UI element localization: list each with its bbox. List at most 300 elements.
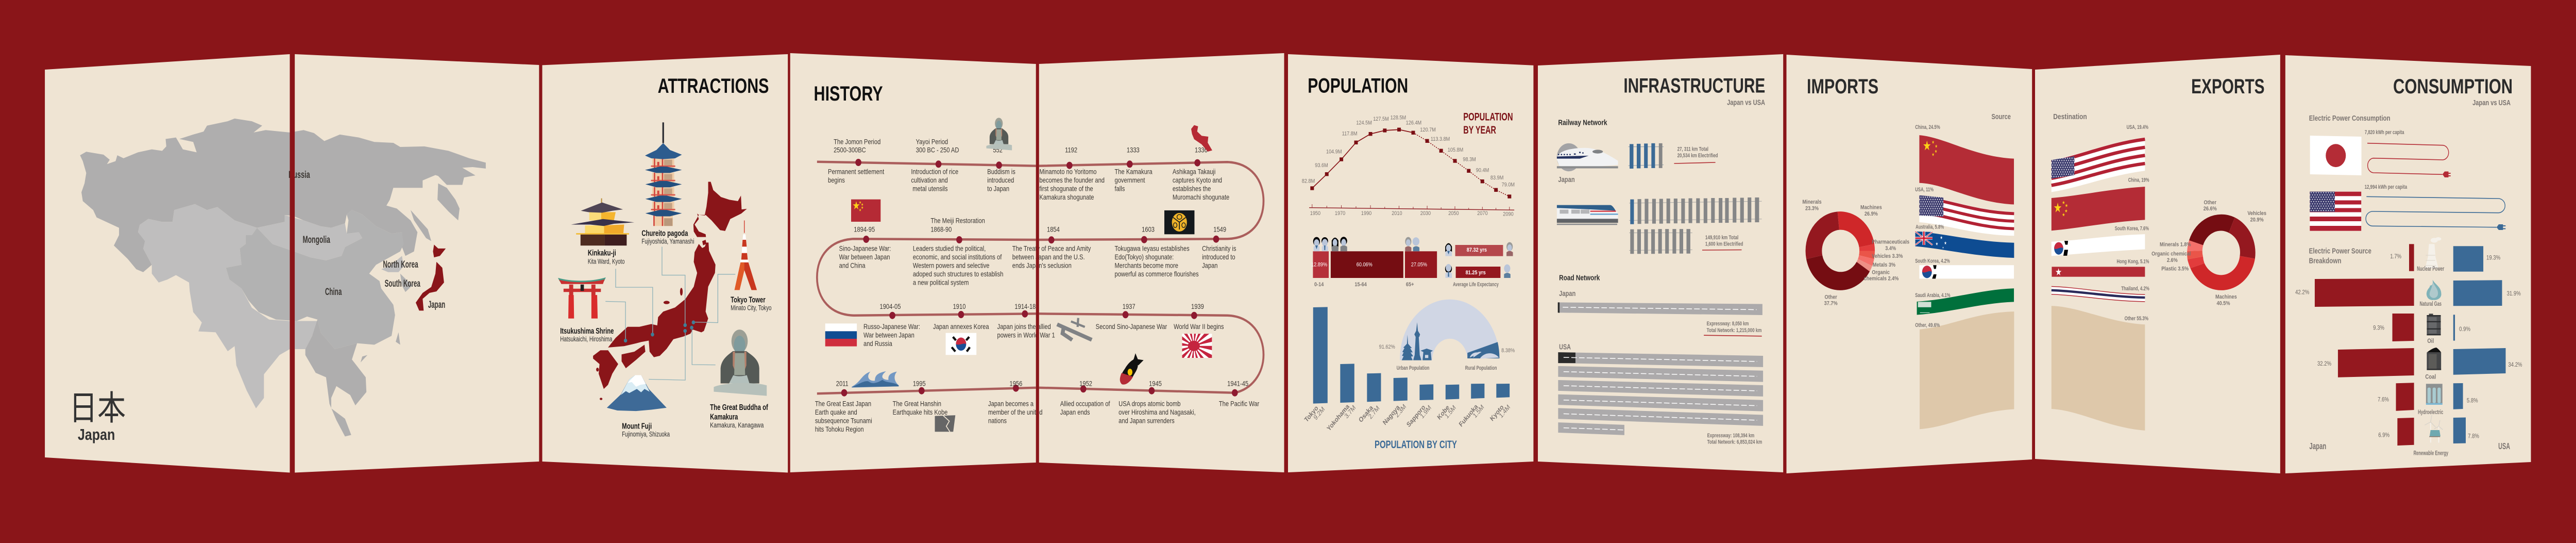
chart: urban vs rural half donut: Rural Population <box>1465 365 1497 371</box>
bar chart: population by city: 3.7M <box>1343 404 1357 420</box>
diverging bar chart: Japan vs USA power sources: 42.2% <box>2295 289 2310 296</box>
source category labels: Oil <box>2427 338 2434 344</box>
timeline row 1 events: captures Kyoto and <box>1173 176 1222 184</box>
road: Japan <box>1558 302 1762 315</box>
label: Kinkaku-ji: Kita Ward, Kyoto <box>588 257 625 266</box>
line chart: population by year: 126.4M <box>1406 120 1421 126</box>
source labels: Australia, 5.8% <box>1916 224 1944 231</box>
heading: railway network: Railway Network <box>1558 118 1607 127</box>
timeline row 3 events: World War II begins <box>1174 323 1224 331</box>
timeline row 4 events: member of the united <box>988 408 1043 416</box>
panel: infrastructure <box>1538 54 1783 472</box>
timeline row 4 events: nations <box>988 417 1007 425</box>
timeline row 3 events: 1904-05 <box>880 303 901 310</box>
panel: population <box>1288 54 1533 472</box>
timeline row 2 events: ends Japan's seclusion <box>1012 261 1072 270</box>
timeline row 1 events <box>828 138 1229 201</box>
timeline row 3 events: Second Sino-Japanese War <box>1096 323 1167 331</box>
timeline row 2 events: Tokugawa Ieyasu establishes <box>1115 244 1190 253</box>
donut labels: exports: 26.6% <box>2204 206 2217 212</box>
icon: China flag <box>851 200 880 222</box>
road stats: Japan: Total Network: 1,215,000 km <box>1707 327 1761 334</box>
life expectancy bars <box>1445 242 1513 288</box>
icon: USA train <box>1557 205 1618 225</box>
timeline row 2 events: 1854 <box>1047 225 1060 234</box>
chart: urban vs rural half donut: 91.62% <box>1379 344 1395 350</box>
flag flow: South Korea <box>2052 234 2145 256</box>
timeline row 1 events: 1192 <box>1065 146 1077 154</box>
map labels: Mongolia <box>303 234 330 245</box>
icon: atomic bomb <box>1120 353 1144 385</box>
road stats: USA <box>1707 433 1762 446</box>
road stats: USA: Expressway: 108,394 km <box>1707 433 1754 439</box>
axis labels: Japan and USA: Japan <box>2309 441 2326 451</box>
label: Mount Fuji: Fujinomiya, Shizuoka <box>622 430 670 438</box>
timeline row 1 events: to Japan <box>987 185 1009 193</box>
timeline row 2 events: economic, and social institutions of <box>913 253 1002 261</box>
heading: attractions: ATTRACTIONS <box>658 74 769 97</box>
label: Kinkaku-ji <box>588 249 624 266</box>
label: Japan roads: Japan <box>1559 289 1575 298</box>
timeline row 3 events: 1910 <box>953 303 966 310</box>
bar chart: population by city: Sapporo <box>1405 403 1427 429</box>
timeline row 4 events: The Great Hanshin <box>893 400 941 408</box>
age breakdown bars: 0-14 <box>1314 282 1324 288</box>
flag flow: other destinations <box>2052 306 2145 431</box>
icon: Kinkaku-ji <box>571 199 634 245</box>
icons: people by age <box>1313 237 1419 251</box>
donut labels: imports: Vehicles 3.3% <box>1872 253 1903 259</box>
panel: map <box>45 49 539 477</box>
age breakdown bars: 65+ <box>1406 282 1414 288</box>
bar chart: population by city <box>1303 307 1512 433</box>
timeline row 3 events: Russo-Japanese War: <box>863 323 920 331</box>
label: Chureito pagoda: Fujiyoshida, Yamanashi <box>641 237 694 245</box>
source category labels: Coal <box>2425 374 2436 381</box>
timeline row 2 events: Sino-Japanese War: <box>839 244 891 253</box>
diverging bar chart: Japan vs USA power sources: 0.9% <box>2459 326 2471 333</box>
icon: bomber plane <box>1057 318 1092 340</box>
diverging bar chart: Japan vs USA power sources: 31.9% <box>2507 290 2521 297</box>
donut labels: exports: Organic chemical <box>2151 251 2191 257</box>
timeline row 4 events: Japan ends <box>1060 408 1090 416</box>
timeline path <box>817 162 1263 393</box>
bar chart: population by city: 1.5M <box>1471 403 1485 420</box>
power cord: Japan <box>2367 143 2451 177</box>
timeline row 4 events: 1941-45 <box>1227 380 1248 388</box>
donut labels: imports: 26.9% <box>1865 211 1878 217</box>
flag flow: Hong Kong <box>2052 267 2145 277</box>
donut labels: exports: 40.5% <box>2217 301 2230 307</box>
road stats: Japan <box>1704 321 1762 336</box>
destination labels: China, 19% <box>2128 177 2149 184</box>
bar chart: population by city: Yokohama <box>1326 403 1351 433</box>
timeline row 2 events: Edo(Tokyo) shogunate: <box>1114 253 1174 261</box>
timeline row 2 events: powerful as commerce flourishes <box>1114 270 1199 278</box>
label: Great Buddha of Kamakura: The Great Buddha of <box>710 403 768 412</box>
timeline row 4 events: 1956 <box>1009 380 1022 388</box>
flag flow: China <box>1919 135 2014 205</box>
icon: Itsukushima Shrine torii <box>558 277 606 319</box>
flag flow: Saudi Arabia <box>1917 288 2014 315</box>
timeline row 1 events: Kamakura shogunate <box>1039 193 1094 201</box>
label: destination: Destination <box>2053 112 2087 121</box>
timeline row 1 events: Permanent settlement <box>828 168 884 176</box>
timeline row 1 events: establishes the <box>1173 185 1211 193</box>
timeline row 3 events: War between Japan <box>863 332 914 339</box>
panel: consumption <box>2285 55 2531 473</box>
railway stats: 149,910 km Total <box>1705 235 1738 241</box>
road stats: USA: Total Network: 6,853,024 km <box>1707 439 1762 446</box>
icon: Tokyo Tower <box>735 220 757 290</box>
line chart: population by year: 105.8M <box>1448 147 1463 153</box>
label: Mount Fuji: Mount Fuji <box>622 422 652 431</box>
flag flow: Thailand <box>2052 286 2145 302</box>
timeline row 4 events: over Hiroshima and Nagasaki, <box>1118 408 1196 416</box>
heading: electric power source breakdown <box>2309 247 2371 265</box>
timeline row 4 events: Earth quake and <box>815 408 857 416</box>
map labels: North Korea <box>383 259 418 270</box>
icon: Mount Fuji <box>607 375 667 411</box>
label: Itsukushima Shrine: Hatsukaichi, Hiroshima <box>560 335 613 343</box>
timeline row 2 events: 1868-90 <box>930 225 952 234</box>
timeline row 2 events <box>839 217 1236 287</box>
life expectancy bars: 81.25 yrs <box>1466 270 1486 276</box>
label: Japan per capita: 7,820 kWh per capita <box>2365 129 2404 136</box>
map labels: South Korea <box>385 278 420 289</box>
donut labels: exports: Plastic 3.5% <box>2161 266 2189 272</box>
chart: urban vs rural half donut: 8.38% <box>1501 348 1515 354</box>
donut labels: imports: Pharmaceuticals <box>1872 239 1909 245</box>
label: Great Buddha of Kamakura: Kamakura <box>710 413 738 422</box>
icon: rising sun flag <box>1182 334 1212 358</box>
map of Japan <box>593 182 747 400</box>
timeline row 4 events: 2011 <box>836 380 849 388</box>
donut labels: imports: chemicals 2.4% <box>1864 276 1899 282</box>
timeline row 4 events: subsequence Tsunami <box>815 417 872 425</box>
railway tracks <box>1629 143 1762 254</box>
timeline row 2 events: 1894-95 <box>854 225 875 234</box>
donut labels: exports: Machines <box>2215 294 2237 300</box>
timeline row 3 events <box>863 303 1224 348</box>
icon: Russia flag <box>825 323 857 347</box>
diverging bar chart: Japan vs USA power sources: 34.2% <box>2508 361 2522 368</box>
timeline row 2 events: 1603 <box>1142 225 1155 234</box>
line chart: population by year: 98.3M <box>1463 157 1476 163</box>
line chart: population by year: 120.7M <box>1420 127 1436 133</box>
line chart: population by year: 1950 <box>1310 210 1320 217</box>
life expectancy bars: Average Life Expectancy <box>1453 282 1499 288</box>
age breakdown bars: 12.89% <box>1311 262 1327 268</box>
life expectancy bars: 87.32 yrs <box>1467 247 1487 253</box>
line chart: population by year: 2030 <box>1420 210 1431 217</box>
flag flow: Australia <box>1916 232 2014 258</box>
timeline row 2 events: Western powers and selective <box>913 261 990 270</box>
icon: oil barrel <box>2427 314 2441 335</box>
timeline row 1 events: Buddism is <box>987 168 1015 176</box>
donut labels: exports: Vehicles <box>2247 210 2266 217</box>
flag flow: South Korea <box>1919 265 2014 278</box>
destination labels <box>2115 124 2149 322</box>
timeline row 3 events: 1937 <box>1123 303 1136 310</box>
bar chart: population by city: 9.2M <box>1312 405 1326 422</box>
heading: consumption: CONSUMPTION <box>2393 75 2513 98</box>
subheading: population by year: BY YEAR <box>1463 125 1496 136</box>
age breakdown bars: 27.05% <box>1411 262 1427 268</box>
subheading: population by year <box>1463 111 1513 136</box>
bar chart: population by city: Kobe <box>1436 403 1451 421</box>
label: Kinkaku-ji: Kinkaku-ji <box>588 249 616 258</box>
age breakdown bars: 60.06% <box>1357 262 1372 268</box>
timeline row 3 events: 1939 <box>1191 303 1204 310</box>
icon: Japan silhouette <box>1191 125 1212 152</box>
subheading: Japan vs USA <box>2472 98 2511 107</box>
heading: electric power source breakdown: Breakdown <box>2309 257 2342 265</box>
source labels: South Korea, 4.2% <box>1915 258 1950 265</box>
heading: population: POPULATION <box>1308 74 1408 97</box>
donut labels: imports <box>1802 199 1909 307</box>
icon: Great Buddha <box>714 330 767 396</box>
cover title: Japan <box>78 426 115 444</box>
timeline row 2 events: Merchants become more <box>1114 261 1178 270</box>
line chart: population by year: 127.5M <box>1373 116 1389 122</box>
label: source: Source <box>1991 112 2011 121</box>
panel: attractions <box>542 54 788 472</box>
label: USA roads: USA <box>1559 342 1571 351</box>
label: Japan railway: Japan <box>1558 175 1575 184</box>
label: Itsukushima Shrine <box>560 327 614 343</box>
label: Tokyo Tower: Tokyo Tower <box>731 296 766 305</box>
heading: population by city: POPULATION BY CITY <box>1375 439 1457 451</box>
donut chart: import categories <box>1806 211 1875 290</box>
timeline row 3 events: powers in World War 1 <box>997 332 1055 339</box>
timeline row 4 events: Japan becomes a <box>988 400 1033 408</box>
line chart: population by year <box>1302 115 1515 218</box>
line chart: population by year: 79.0M <box>1502 182 1515 188</box>
donut labels: imports: 3.4% <box>1885 245 1896 252</box>
icon: renewable energy <box>2425 415 2443 442</box>
diverging bar chart: Japan vs USA power sources: 5.8% <box>2467 398 2478 404</box>
label: Great Buddha of Kamakura: Kamakura, Kanagawa <box>710 421 764 429</box>
timeline row 1 events: Minamoto no Yoritomo <box>1039 168 1096 176</box>
timeline row 4 events: USA drops atomic bomb <box>1118 400 1181 408</box>
bar chart: population by city: Osaka <box>1358 404 1375 424</box>
label: Chureito pagoda <box>641 229 694 245</box>
timeline row 4 events: 1995 <box>913 380 926 388</box>
icon: Chureito pagoda <box>645 122 682 226</box>
timeline row 3 events: Japan annexes Korea <box>933 323 989 331</box>
source labels <box>1915 124 1951 328</box>
bar chart: population by city: Nagoya <box>1382 403 1401 426</box>
bar chart: population by city: 1.9M <box>1419 404 1433 420</box>
bar chart: population by city: 1.5M <box>1444 404 1457 420</box>
label: Great Buddha of Kamakura <box>710 403 768 429</box>
source labels: Other, 49.6% <box>1915 322 1940 328</box>
icon: natural gas flame <box>2427 280 2442 300</box>
donut labels: imports: Minerals <box>1802 199 1822 205</box>
timeline row 2 events: and China <box>839 261 866 270</box>
timeline row 1 events: Introduction of rice <box>911 168 958 176</box>
map labels: Russia <box>289 169 310 180</box>
timeline row 4 events: 1952 <box>1079 380 1092 388</box>
donut labels: imports: Other <box>1824 294 1837 301</box>
diverging bar chart: Japan vs USA power sources: 19.3% <box>2486 255 2501 261</box>
subheading: population by year: POPULATION <box>1463 111 1513 123</box>
timeline row 1 events: The Jomon Period <box>834 138 880 146</box>
timeline row 2 events: Leaders studied the political, <box>913 244 986 253</box>
timeline row 1 events: first shogunate of the <box>1039 185 1093 193</box>
railway stats <box>1674 146 1743 250</box>
donut labels: imports: Organic <box>1872 270 1890 276</box>
timeline row 2 events: a new political system <box>913 278 969 287</box>
donut labels: exports: 2.6% <box>2167 257 2178 264</box>
source labels: USA, 11% <box>1915 187 1934 193</box>
line chart: population by year: 2090 <box>1503 211 1514 218</box>
diverging bar chart: Japan vs USA power sources: 7.6% <box>2378 397 2389 403</box>
heading: infrastructure: INFRASTRUCTURE <box>1623 74 1765 97</box>
timeline row 2 events: Christianity is <box>1202 244 1236 253</box>
timeline row 2 events: The Meiji Restoration <box>930 217 985 225</box>
source category labels: Natural Gas <box>2419 301 2442 307</box>
line chart: population by year: 82.8M <box>1302 178 1315 185</box>
line chart: population by year: 117.8M <box>1342 131 1358 137</box>
bar chart: population by city: 1.4M <box>1498 403 1512 420</box>
line chart: population by year: 1990 <box>1361 210 1372 217</box>
timeline row 1 events: begins <box>828 176 845 184</box>
timeline row 4 events: The Pacific War <box>1219 400 1259 408</box>
skyline silhouette <box>1402 322 1433 360</box>
timeline row 1 events: cultivation and <box>911 176 948 184</box>
timeline row 1 events: Muromachi shogunate <box>1173 193 1229 201</box>
donut labels: exports <box>2151 200 2266 307</box>
icon: Japanese bullet train <box>1557 143 1618 171</box>
destination labels: Other 55.3% <box>2125 316 2148 322</box>
subheading: Japan vs USA <box>1727 98 1765 107</box>
bar chart: population by city: 2.3M <box>1394 403 1408 419</box>
map of Asia <box>80 119 486 436</box>
age breakdown bars <box>1311 251 1437 288</box>
axis labels: Japan and USA <box>2309 441 2510 451</box>
timeline row 1 events: metal utensils <box>912 185 947 193</box>
flag flow: other sources <box>1920 311 2014 429</box>
panel: history <box>790 49 1284 477</box>
source category labels: Nuclear Power <box>2417 266 2444 272</box>
line chart: population by year: 83.9M <box>1490 175 1503 181</box>
destination labels: USA, 19.4% <box>2127 124 2148 130</box>
donut labels: exports: 20.9% <box>2250 217 2264 223</box>
timeline row 2 events: adoped such structures to establish <box>913 270 1004 278</box>
road stats: Japan: Expressway: 8,050 km <box>1707 321 1749 327</box>
icon: Japan flag <box>2310 136 2362 175</box>
donut labels: imports: 23.3% <box>1805 206 1819 212</box>
icon: South Korea flag <box>946 333 976 355</box>
icon: Tokugawa crest <box>1164 210 1194 234</box>
destination labels: South Korea, 7.6% <box>2115 226 2149 232</box>
age breakdown bars: 15-64 <box>1354 282 1367 288</box>
timeline row 2 events: 1549 <box>1213 225 1226 234</box>
railway stats: 20,534 km Electrified <box>1677 153 1718 159</box>
fold between map panels <box>290 49 295 477</box>
roads: USA <box>1558 352 1763 435</box>
donut labels: imports: Machines <box>1860 205 1882 211</box>
label: Chureito pagoda: Chureito pagoda <box>641 229 688 238</box>
timeline row 2 events: introduced to <box>1202 253 1235 261</box>
source category labels <box>2414 266 2448 457</box>
power cord: USA <box>2366 196 2505 230</box>
timeline row 1 events: Ashikaga Takauji <box>1173 168 1215 176</box>
label: USA per capita: 12,994 kWh per capita <box>2365 184 2407 190</box>
railway stats: 27, 311 km Total <box>1677 146 1708 153</box>
icon: tsunami waves <box>852 371 899 388</box>
timeline row 1 events: falls <box>1114 185 1125 193</box>
timeline row 1 events: government <box>1114 176 1145 184</box>
timeline row 4 events: hits Tohoku Region <box>815 425 864 433</box>
timeline row 4 events: The Great East Japan <box>815 400 871 408</box>
timeline row 4 events: 1945 <box>1149 380 1162 388</box>
flag flow: China <box>2052 187 2145 231</box>
bar chart: population by city: Fukuoka <box>1458 403 1479 429</box>
source labels: China, 24.5% <box>1915 124 1940 130</box>
icon: hydroelectric dam <box>2426 384 2443 405</box>
line chart: population by year: 93.6M <box>1315 162 1328 169</box>
bar chart: population by city: 2.7M <box>1367 404 1381 421</box>
map labels: China <box>325 286 342 297</box>
donut labels: imports: Metals 3% <box>1873 262 1895 268</box>
cover title: 日本 <box>69 381 126 430</box>
line chart: population by year: 128.5M <box>1391 115 1406 121</box>
timeline row 1 events: 1336 <box>1195 146 1208 154</box>
timeline row 1 events: becomes the founder and <box>1039 176 1105 184</box>
diverging bar chart: Japan vs USA power sources: 9.3% <box>2373 325 2384 332</box>
donut labels: exports: Other <box>2204 200 2216 206</box>
heading: imports: IMPORTS <box>1807 75 1878 98</box>
timeline row 1 events: 300 BC - 250 AD <box>916 146 959 154</box>
diverging bar chart: Japan vs USA power sources: 32.2% <box>2317 360 2332 367</box>
bar chart: population by city: Tokyo <box>1303 404 1319 424</box>
timeline row 3 events: Japan joins the allied <box>997 323 1051 331</box>
label: Tokyo Tower <box>731 296 772 312</box>
timeline row 4 events <box>815 380 1259 433</box>
icon: nuclear cooling tower <box>2425 237 2441 268</box>
timeline row 2 events: War between Japan <box>839 253 890 261</box>
axis labels: Japan and USA: USA <box>2498 441 2510 451</box>
panel: exports <box>2035 55 2280 473</box>
icon: coal cart <box>2427 348 2441 370</box>
line chart: population by year: 104.9M <box>1326 149 1342 155</box>
timeline row 1 events: 552 <box>993 146 1003 154</box>
map labels <box>289 169 445 310</box>
source category labels: Hydroelectric <box>2418 409 2443 416</box>
label: Mount Fuji <box>622 422 670 438</box>
line chart: population by year: 2070 <box>1477 210 1488 217</box>
source labels: Saudi Arabia, 4.1% <box>1915 292 1951 299</box>
connector lines and location dots <box>605 246 735 380</box>
timeline row 4 events: Earthquake hits Kobe <box>893 408 948 416</box>
timeline row 2 events: between Japan and the U.S. <box>1012 253 1085 261</box>
heading: history: HISTORY <box>814 82 883 105</box>
timeline row 2 events: Japan <box>1202 261 1218 270</box>
label: Tokyo Tower: Minato City, Tokyo <box>731 304 772 312</box>
label: Itsukushima Shrine: Itsukushima Shrine <box>560 327 614 336</box>
line chart: population by year: 1970 <box>1335 210 1346 217</box>
destination labels: Hong Kong, 5.1% <box>2117 259 2149 265</box>
timeline row 1 events: 2500-300BC <box>834 146 866 154</box>
timeline row 3 events: and Russia <box>863 340 892 348</box>
chart: urban vs rural half donut: Urban Population <box>1397 365 1429 371</box>
donut chart: export categories <box>2187 215 2256 290</box>
map labels: Japan <box>428 299 445 310</box>
timeline row 3 events: 1914-18 <box>1014 303 1036 310</box>
